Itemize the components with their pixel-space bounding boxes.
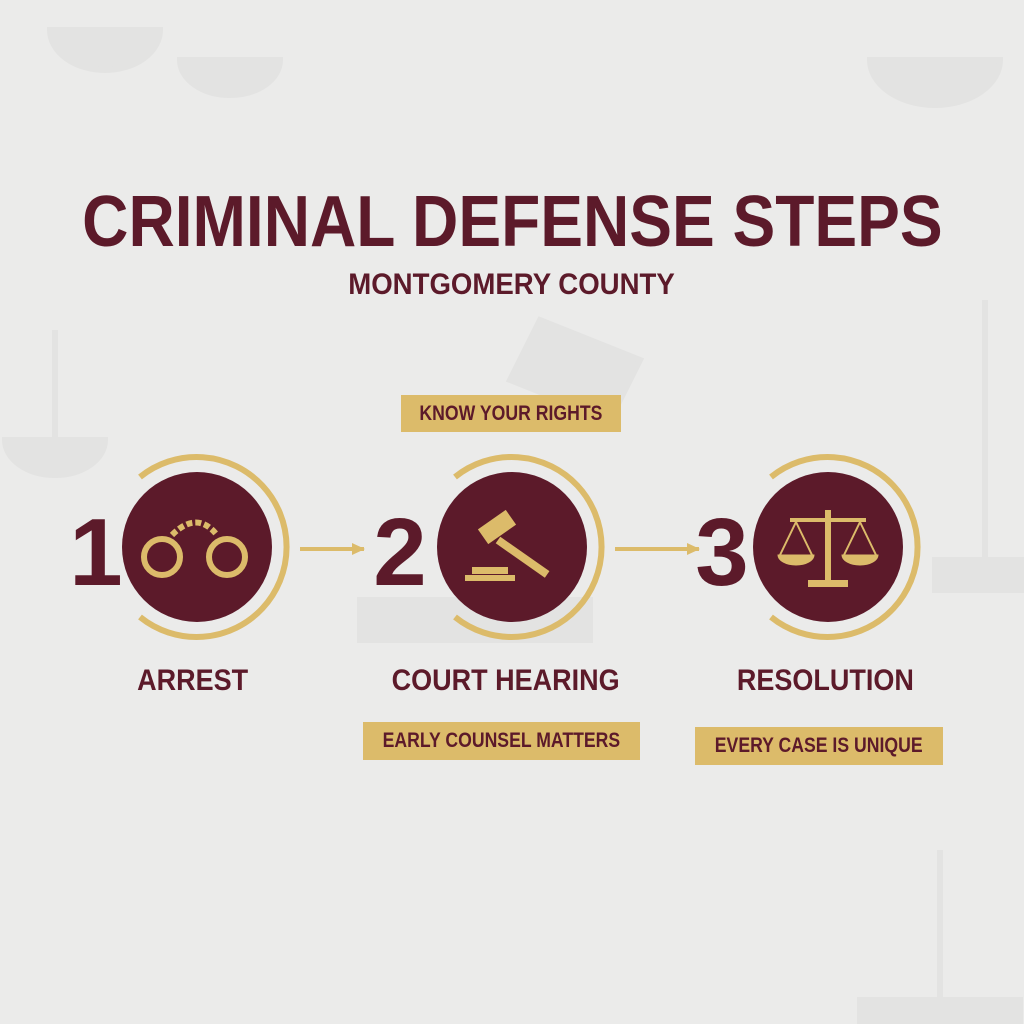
- tag: know your rights: KNOW YOUR RIGHTS: [420, 402, 602, 424]
- title: CRIMINAL DEFENSE STEPS: [82, 182, 942, 262]
- step 2 number: 2: [373, 499, 427, 606]
- arrow 2: [615, 547, 699, 551]
- steps diagram: [69, 454, 921, 640]
- step 1 icon: handcuffs: [122, 457, 287, 637]
- arrow 1: [300, 547, 364, 551]
- label: resolution: RESOLUTION: [736, 664, 913, 697]
- tag: every case is unique: [695, 727, 943, 765]
- label: arrest: ARREST: [137, 664, 249, 697]
- step 1 number: 1: [69, 499, 123, 606]
- tag: early counsel matters: EARLY COUNSEL MATTERS: [383, 729, 620, 752]
- step 3 number: 3: [695, 499, 749, 606]
- step 3 icon: scales: [753, 457, 918, 637]
- tag: every case is unique: EVERY CASE IS UNIQUE: [715, 734, 923, 757]
- tag: know your rights: [401, 395, 621, 432]
- label: court hearing: COURT HEARING: [392, 664, 620, 697]
- step 2 icon: gavel: [437, 457, 602, 637]
- subtitle: MONTGOMERY COUNTY: [349, 268, 675, 301]
- tag: early counsel matters: [363, 722, 640, 760]
